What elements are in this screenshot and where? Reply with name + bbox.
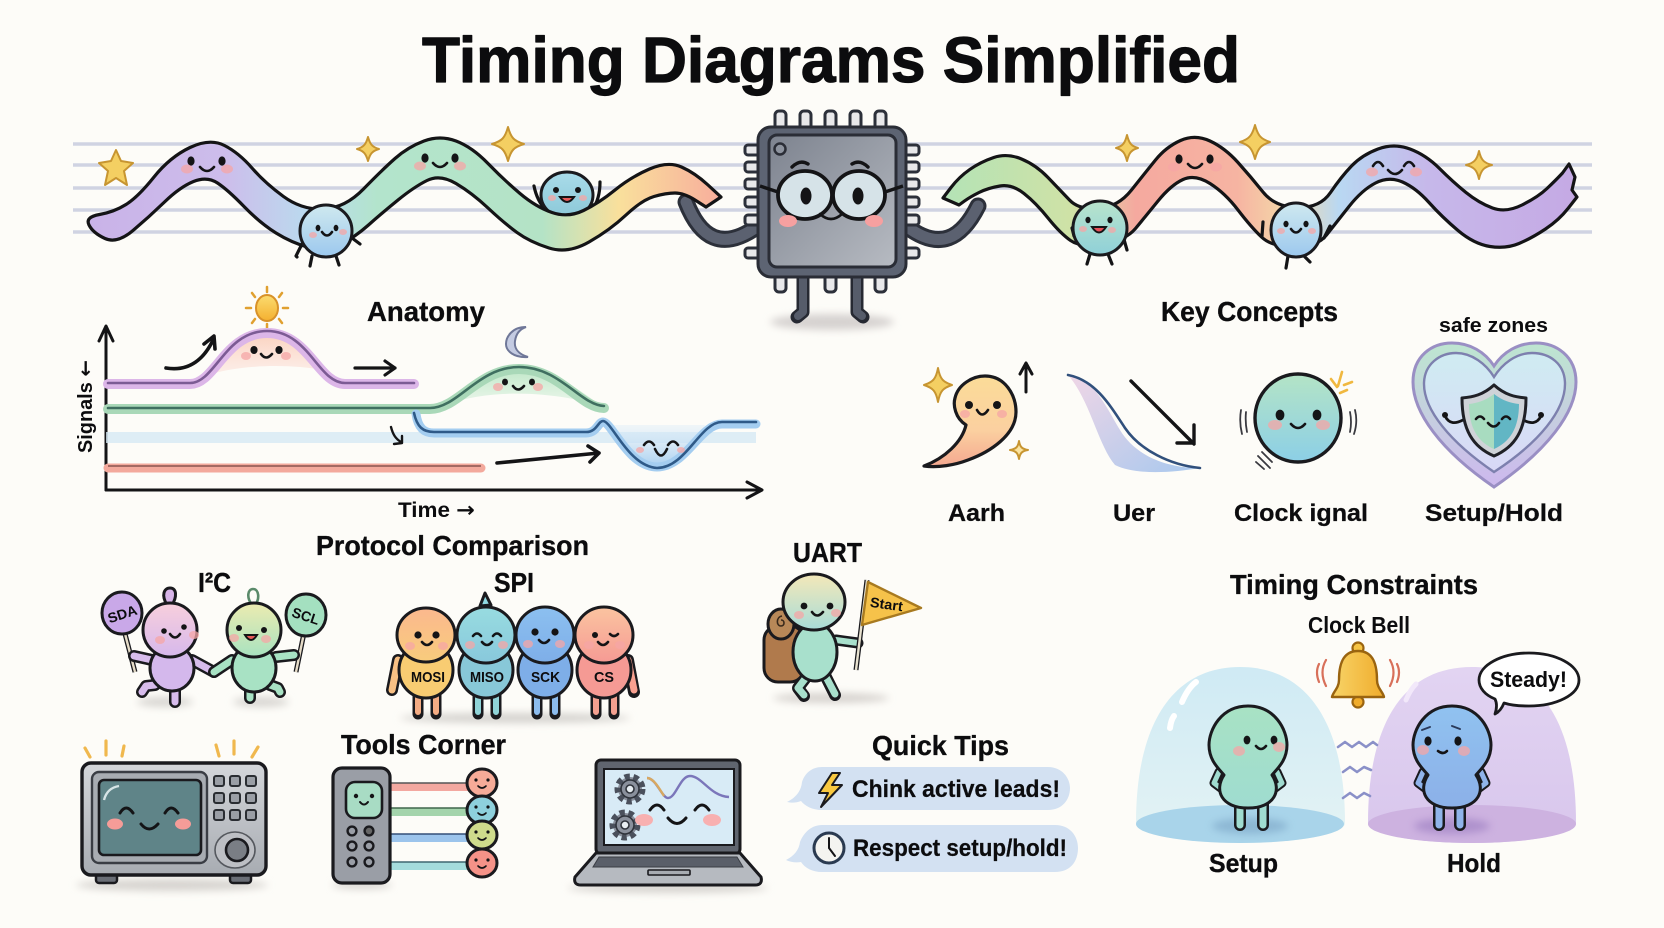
concept: rising tadpole — [924, 363, 1032, 527]
ball sparkle rays — [1331, 372, 1352, 393]
sign: SDA: SDA — [106, 602, 139, 626]
dome: setup — [1136, 667, 1345, 843]
base — [575, 853, 761, 885]
character: MOSI — [392, 608, 455, 714]
section heading: Tools Corner: Tools Corner — [341, 729, 506, 760]
arrow: up — [1020, 363, 1032, 392]
tool: logic analyzer — [332, 768, 497, 889]
device body — [333, 768, 390, 883]
tool: oscilloscope — [76, 741, 268, 891]
signal: blue with dip — [414, 413, 756, 468]
character: hold — [1413, 706, 1491, 834]
label: Setup: Setup — [1209, 848, 1278, 878]
signal: red line — [108, 466, 481, 468]
knob — [215, 832, 255, 868]
shadows — [400, 713, 630, 723]
protocol: UART traveller — [764, 537, 921, 703]
flag with Start — [856, 580, 921, 670]
head — [783, 574, 845, 630]
tadpole face — [960, 401, 1007, 418]
ball vibration marks — [1240, 410, 1356, 469]
speech bubble: Steady: Steady! — [1490, 667, 1567, 692]
bubble shape — [786, 825, 1078, 872]
character: MISO: MISO — [470, 669, 504, 686]
arrow: down — [1131, 381, 1194, 444]
left signal wave with characters — [88, 138, 758, 266]
face: green crest — [414, 153, 466, 170]
icon: slope shape — [1068, 375, 1200, 472]
axis label: time: Time → — [398, 498, 475, 522]
screen face — [104, 786, 191, 830]
tool: laptop — [568, 760, 768, 893]
face: purple crest — [181, 156, 233, 174]
section heading: Protocol Comparison: Protocol Comparison — [316, 530, 589, 561]
icon: bell — [1317, 642, 1399, 708]
character: green yellow — [214, 589, 294, 698]
icon: left chip arm — [686, 202, 758, 239]
buttons — [214, 776, 256, 820]
character: blue egg on wave — [296, 205, 360, 266]
mascot shadow — [770, 314, 894, 330]
arrow: falling hook — [391, 427, 402, 444]
face: pink pulse — [241, 346, 291, 360]
body — [82, 763, 266, 875]
icon: right chip arm — [906, 206, 978, 240]
section heading: Quick Tips: Quick Tips — [872, 730, 1009, 761]
speech bubble: Steady — [1479, 653, 1579, 714]
face: salmon crest — [1168, 154, 1222, 172]
chip corner dot — [774, 144, 786, 154]
character: MOSI: MOSI — [411, 669, 445, 686]
label: Aarh: Aarh — [948, 500, 1005, 527]
icon: inner heart — [1424, 353, 1565, 472]
chip mascot — [745, 111, 919, 330]
device screen face — [354, 794, 374, 804]
icon: sun — [246, 287, 288, 329]
icon: sparkles — [924, 368, 1028, 459]
icon: outer heart — [1413, 343, 1576, 487]
label: Hold: Hold — [1447, 848, 1501, 878]
staff lines behind signal waves — [73, 144, 1592, 232]
arrow: rising edge — [166, 336, 215, 369]
chip inner face — [769, 135, 896, 267]
icon: tadpole character — [924, 376, 1016, 467]
timing constraints scene — [1136, 612, 1579, 878]
arrow: high level — [355, 361, 395, 375]
label: Clock ignal: Clock ignal — [1234, 500, 1368, 527]
section heading: Key Concepts: Key Concepts — [1161, 296, 1338, 327]
flag with Start: Start — [869, 594, 904, 614]
signal: blue band — [106, 432, 756, 443]
device screen — [346, 782, 382, 818]
tip bubble: setup hold — [786, 825, 1078, 872]
sign: SCL: SCL — [290, 604, 322, 628]
chip body — [758, 127, 906, 277]
decorative stars: yellow sparkles — [99, 125, 1492, 185]
icon: shield — [1442, 385, 1544, 456]
mascot glasses and face — [760, 162, 903, 227]
wave tube right — [943, 137, 1577, 247]
body — [793, 623, 837, 681]
probe heads — [467, 769, 497, 877]
tip text: Respect setup/hold! — [853, 835, 1067, 862]
character: setup — [1209, 706, 1288, 834]
protocol: SPI group — [392, 567, 634, 723]
concept: clock signal — [1234, 372, 1368, 527]
axes — [99, 326, 762, 498]
face: lilac crest — [1366, 162, 1422, 176]
laptop face — [635, 805, 721, 826]
title: Timing Diagrams Simplified — [422, 24, 1240, 96]
icon: lightning bolt — [819, 773, 842, 807]
section heading: Timing Constraints: Timing Constraints — [1230, 569, 1478, 600]
bubble shape — [787, 767, 1070, 810]
label: Clock Bell: Clock Bell — [1308, 612, 1410, 638]
display — [604, 769, 734, 845]
keyboard — [593, 857, 743, 867]
character: pink lilac — [134, 588, 214, 702]
legs and arm — [798, 640, 858, 696]
icon: moon — [506, 327, 528, 357]
mascot legs — [797, 277, 863, 317]
signal: purple with pink bump — [108, 331, 414, 384]
icon: clock ball — [1255, 374, 1341, 462]
trackpad — [648, 870, 690, 875]
axis label: signals: Signals ← — [73, 360, 97, 453]
lid — [596, 760, 740, 854]
character: light blue egg on wave — [1262, 203, 1330, 268]
probe wires — [390, 783, 470, 866]
screen — [92, 772, 207, 863]
icon: slope line — [1068, 375, 1200, 468]
label: Setup/Hold: Setup/Hold — [1425, 500, 1563, 527]
chip pins — [745, 111, 919, 292]
face: blue dip — [636, 442, 685, 456]
shadows — [137, 697, 289, 707]
icon: clock — [814, 833, 844, 863]
face — [794, 603, 841, 619]
face: green pulse — [493, 379, 543, 391]
dome: hold — [1368, 667, 1576, 843]
shadow — [773, 693, 889, 703]
label: Uer: Uer — [1113, 500, 1155, 527]
character: SCK: SCK — [531, 669, 560, 686]
character: green egg on wave — [1072, 201, 1127, 264]
wave tube left — [88, 138, 721, 250]
shadow — [568, 883, 768, 893]
waveform on display — [647, 776, 729, 798]
rays — [85, 741, 258, 757]
label: safe zones: safe zones — [1439, 315, 1548, 337]
label: I2C: I²C — [198, 567, 231, 598]
concept: setup/hold heart — [1413, 315, 1576, 527]
device buttons — [348, 827, 373, 866]
shadow — [332, 881, 392, 889]
shadow — [76, 879, 268, 891]
sign: SCL — [286, 594, 326, 672]
signal: green with bump — [108, 367, 604, 409]
character: MISO — [457, 593, 515, 714]
label: UART: UART — [793, 537, 862, 568]
timing chart: anatomy — [73, 287, 762, 522]
label: SPI: SPI — [494, 567, 534, 598]
protocol: I2C pair — [102, 567, 326, 707]
ball face — [1268, 410, 1330, 430]
zigzags between domes — [1338, 742, 1377, 798]
character: CS — [575, 607, 634, 714]
concept: falling slope — [1068, 375, 1200, 527]
character: SCK — [516, 607, 574, 714]
arrow: to low pulse — [497, 446, 599, 463]
character: CS: CS — [594, 669, 614, 686]
gears — [613, 777, 642, 837]
tip text: Chink active leads! — [852, 776, 1060, 803]
right signal wave with characters — [906, 137, 1577, 268]
backpack — [764, 609, 804, 682]
character: egg peeking over wave — [534, 172, 600, 218]
feet — [96, 872, 251, 883]
section heading: Anatomy: Anatomy — [367, 296, 485, 327]
tip bubble: active — [787, 767, 1070, 810]
sign: SDA — [102, 592, 142, 672]
